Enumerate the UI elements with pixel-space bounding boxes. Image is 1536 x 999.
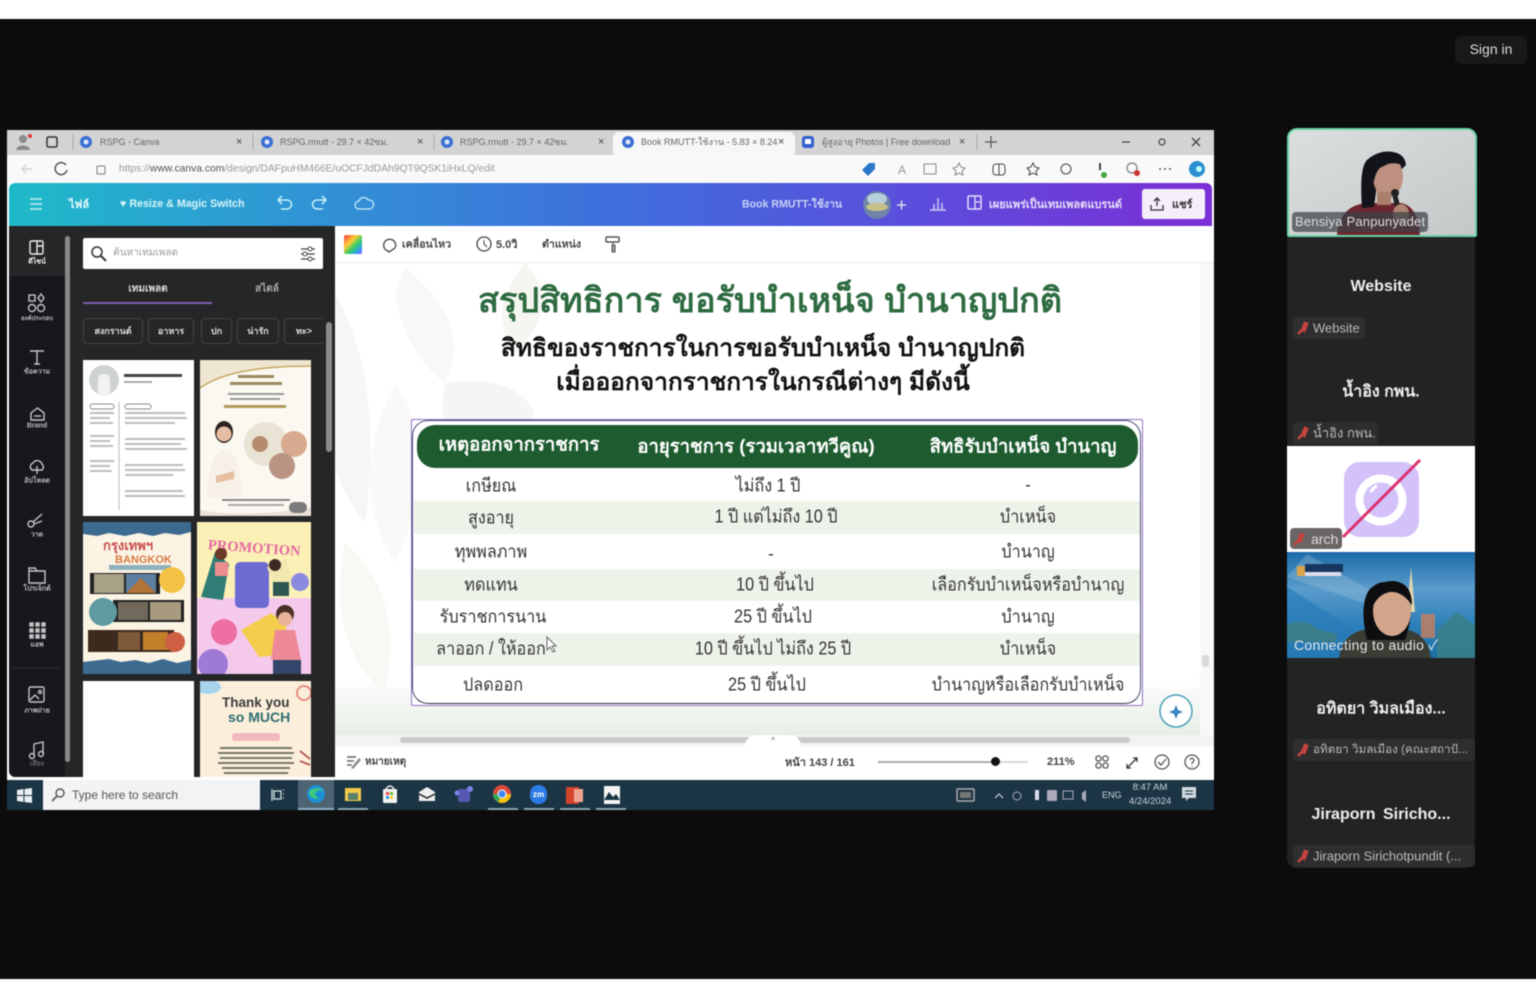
- page count: หน้า 143 / 161: [785, 757, 855, 769]
- panel scrollbar: [326, 322, 332, 452]
- participant tile: Nam-ing: [1287, 343, 1475, 446]
- panel tabs: เทมเพลต: [128, 284, 168, 294]
- benefits table: 25 ปี ขึ้นไป: [728, 674, 806, 694]
- participant tile: arch: [1287, 446, 1475, 552]
- zoom slider: [878, 761, 1028, 763]
- template thumbnail: blank: [83, 681, 194, 777]
- horizontal scrollbar: [335, 735, 1214, 746]
- keyword chips: สงกรานต์: [94, 326, 132, 336]
- slide title: สรุปสิทธิการ ขอรับบำเหน็จ บำนาญปกติ: [478, 282, 1062, 320]
- share button: แชร์: [1172, 199, 1192, 211]
- magic assistant button: [1158, 694, 1194, 728]
- search box: [43, 780, 260, 810]
- left rail: [9, 226, 65, 777]
- active tab underline: [83, 302, 212, 304]
- template thumbnail: Bangkok travel: BANGKOK: [115, 554, 172, 566]
- display name: Jiraporn Siricho...: [1311, 806, 1451, 823]
- browser tab bar: RSPG - Canva: [100, 137, 160, 147]
- footer icons: [1094, 754, 1200, 770]
- browser tab bar: ผู้สูงอายุ Photos | Free download: [822, 137, 950, 147]
- chart icon: [930, 198, 946, 212]
- sign in button: Sign in: [1470, 41, 1512, 57]
- table inner frame: [412, 420, 1141, 704]
- position: ตำแหน่ง: [542, 238, 581, 250]
- benefits table: -: [768, 544, 774, 564]
- participant tile: Jiraporn: [1287, 764, 1475, 868]
- sign in button: [1455, 36, 1527, 64]
- editor footer: หมายเหตุ: [365, 756, 406, 768]
- browser tab bar: ×: [236, 136, 242, 148]
- rail labels: ดีไซน์: [28, 258, 46, 266]
- template thumbnail: promotion: [197, 522, 311, 674]
- row: long service: รับราชการนาน: [440, 606, 546, 626]
- display name: น้ำอิง กพน.: [1342, 384, 1420, 400]
- horizontal scrollbar: ^: [771, 736, 775, 745]
- faded leaves background: [336, 264, 542, 681]
- template thumbnail: thank you: so MUCH: [228, 709, 290, 725]
- icons and tab titles: [16, 133, 1201, 150]
- browser tab bar: RSPG.rmutt - 29.7 × 42ซม.: [280, 137, 389, 147]
- document name: Book RMUTT-ใช้งาน: [742, 198, 842, 210]
- muted label: [1293, 317, 1365, 339]
- row: old age: สูงอายุ: [468, 508, 514, 528]
- template thumbnail: resume: [83, 360, 194, 516]
- muted label: น้ำอิง กพน.: [1313, 426, 1376, 440]
- benefits table: บำนาญหรือเลือกรับบำเหน็จ: [932, 674, 1124, 694]
- browser tab bar: RSPG.rmutt - 29.7 × 42ซม.: [460, 137, 569, 147]
- file menu: ไฟล์: [69, 199, 89, 211]
- browser tab bar: Book RMUTT-ใช้งาน - 5.83 × 8.24: [641, 137, 777, 147]
- panel collapse handle: [335, 470, 344, 532]
- template thumbnail: Bangkok travel: กรุงเทพฯ: [103, 538, 153, 554]
- slide subtitle: [501, 332, 1025, 396]
- browser tab bar: [7, 130, 1214, 155]
- clock: [1128, 782, 1172, 807]
- left rail: อัปโหลด: [24, 478, 50, 484]
- start button: [16, 787, 33, 804]
- row: compensation: ทดแทน: [464, 574, 518, 594]
- slide subtitle: เมื่อออกจากราชการในกรณีต่างๆ มีดังนี้: [556, 369, 970, 396]
- top white strip: [0, 0, 1536, 19]
- menu icon: [29, 198, 43, 210]
- left rail: ภาพถ่าย: [24, 708, 50, 714]
- template thumbnail: thank you: Thank you: [222, 695, 290, 710]
- muted label: Jiraporn Sirichotpundit (...: [1313, 848, 1461, 864]
- muted label: อทิตยา วิมลเมือง (คณะสถาปั...: [1313, 743, 1468, 756]
- zoom percentage: 211%: [1047, 756, 1075, 768]
- animate button: [382, 238, 398, 254]
- editor toolbar: [335, 226, 1214, 263]
- benefits table: 25 ปี ขึ้นไป: [734, 606, 812, 626]
- left rail: แอพ: [30, 642, 44, 648]
- keyword chips: [83, 318, 143, 344]
- benefits table: [411, 419, 1143, 706]
- participant tile: Bensiya: [1287, 128, 1477, 237]
- text: ปก: [211, 326, 222, 336]
- row: resign: ลาออก / ให้ออก: [436, 638, 546, 658]
- navigation and browser icons: [22, 160, 1206, 179]
- slide canvas: [335, 263, 1200, 735]
- row: dismissal: ปลดออก: [463, 674, 523, 694]
- text: ทะ>: [296, 326, 312, 336]
- disabled camera avatar: [1342, 458, 1422, 538]
- canvas right scrollbar: [1200, 263, 1214, 745]
- windows taskbar: [7, 780, 1214, 810]
- benefits table: เลือกรับบำเหน็จหรือบำนาญ: [932, 574, 1124, 594]
- taskbar apps: zm: [533, 790, 544, 799]
- left rail: โปรเจ็กต์: [23, 586, 51, 592]
- muted name label: arch: [1311, 531, 1338, 547]
- task view icon: [270, 788, 285, 802]
- participant tile: Website: [1287, 237, 1475, 343]
- active app highlight: [298, 780, 334, 810]
- benefits table: อายุราชการ (รวมเวลาทวีคูณ): [637, 436, 875, 456]
- search box: Type here to search: [72, 788, 178, 802]
- benefits table: 10 ปี ขึ้นไป ไม่ถึง 25 ปี: [695, 638, 851, 658]
- language: ENG: [1102, 790, 1122, 800]
- browser tab bar: ×: [598, 136, 604, 148]
- active rail item: [9, 226, 65, 276]
- resize button: ♥ Resize & Magic Switch: [120, 198, 245, 210]
- duration: [476, 236, 492, 252]
- template thumbnail: Bangkok travel: [83, 522, 191, 674]
- taskbar apps: [306, 784, 626, 811]
- benefits table: สิทธิรับบำเหน็จ บำนาญ: [930, 436, 1116, 456]
- undo, redo, cloud icons: [277, 195, 375, 210]
- benefits table: บำนาญ: [1001, 542, 1055, 562]
- benefits table: เหตุออกจากราชการ: [439, 434, 599, 454]
- template thumbnail: woman with circles: [200, 360, 311, 516]
- speaker portrait: [1289, 130, 1474, 236]
- muted label: [1293, 845, 1475, 867]
- left scrollbar: [65, 226, 83, 777]
- benefits table: บำเหน็จ: [1000, 638, 1056, 658]
- clock: 4/24/2024: [1129, 796, 1171, 807]
- name label: Bensiya Panpunyadet: [1295, 214, 1425, 229]
- browser tab bar: ×: [417, 136, 423, 148]
- text: น่ารัก: [247, 326, 269, 336]
- status text: Connecting to audio ✓: [1294, 637, 1438, 653]
- mouse cursor: [546, 636, 558, 653]
- muted name label: [1290, 528, 1342, 549]
- left rail: วาด: [31, 532, 43, 538]
- participant tile: Athitaya: [1287, 658, 1475, 764]
- left rail: องค์ประกอบ: [21, 316, 53, 322]
- template thumbnail: thank you: [200, 681, 311, 777]
- search box: [83, 238, 323, 269]
- left rail: ข้อความ: [24, 368, 50, 376]
- clock: 8:47 AM: [1133, 782, 1167, 793]
- template panel: [83, 226, 335, 777]
- address bar: [7, 155, 1214, 183]
- color swatch: [344, 235, 362, 254]
- browser tab bar: ×: [959, 136, 965, 148]
- editor toolbar: เคลื่อนไหว: [402, 238, 451, 250]
- rail icons: [13, 240, 59, 760]
- browser tab bar: ×: [778, 136, 784, 148]
- table header: [417, 425, 1138, 468]
- editor toolbar: 5.0วิ: [496, 239, 517, 251]
- left rail: เสียง: [30, 760, 44, 768]
- system tray icons: [956, 788, 1087, 802]
- benefits table: ไม่ถึง 1 ปี: [736, 476, 800, 496]
- active tab: [613, 132, 795, 155]
- navigation and browser icons: A: [898, 163, 906, 177]
- paint roller icon: [604, 236, 620, 254]
- muted label: Website: [1313, 320, 1360, 336]
- participant portrait: [1286, 554, 1476, 659]
- text: สไตล์: [255, 284, 279, 294]
- share button: [1142, 189, 1205, 219]
- left rail: Brand: [27, 422, 47, 430]
- notification icon: [1181, 786, 1197, 802]
- display name: อทิตยา วิมลเมือง...: [1316, 700, 1446, 718]
- striped rows: [414, 501, 1140, 534]
- template thumbnail: promotion: PROMOTION: [207, 537, 302, 560]
- muted label: [1293, 422, 1378, 444]
- notes button: [346, 756, 362, 770]
- template button: เผยแพร่เป็นเทมเพลตแบรนด์: [989, 199, 1122, 211]
- canva header: [9, 183, 1212, 226]
- benefits table: บำเหน็จ: [1000, 506, 1056, 526]
- row: disability: ทุพพลภาพ: [455, 542, 527, 562]
- display name: Website: [1350, 278, 1412, 295]
- avatar: [862, 190, 907, 220]
- url: https://www.canva.com/design/DAFpuHM466E/uOCFJdDAh9QT9QSK1iHxLQ/edit: [119, 164, 495, 174]
- muted label: [1293, 739, 1475, 761]
- row: retirement: เกษียณ: [466, 476, 516, 496]
- benefits table: 1 ปี แต่ไม่ถึง 10 ปี: [714, 506, 838, 526]
- slide subtitle: สิทธิของราชการในการขอรับบำเหน็จ บำนาญปกติ: [501, 335, 1025, 362]
- shared screen: browser window: [7, 130, 1214, 810]
- bottom white strip: [0, 979, 1536, 999]
- search box: ค้นหาเทมเพลต: [113, 248, 178, 258]
- text: อาหาร: [158, 326, 184, 336]
- template button: [966, 194, 1122, 211]
- benefits table: -: [1025, 474, 1031, 494]
- participant tile: connecting: [1287, 552, 1475, 658]
- benefits table: บำนาญ: [1001, 606, 1055, 626]
- benefits table: 10 ปี ขึ้นไป: [736, 574, 814, 594]
- editor footer: [335, 746, 1214, 780]
